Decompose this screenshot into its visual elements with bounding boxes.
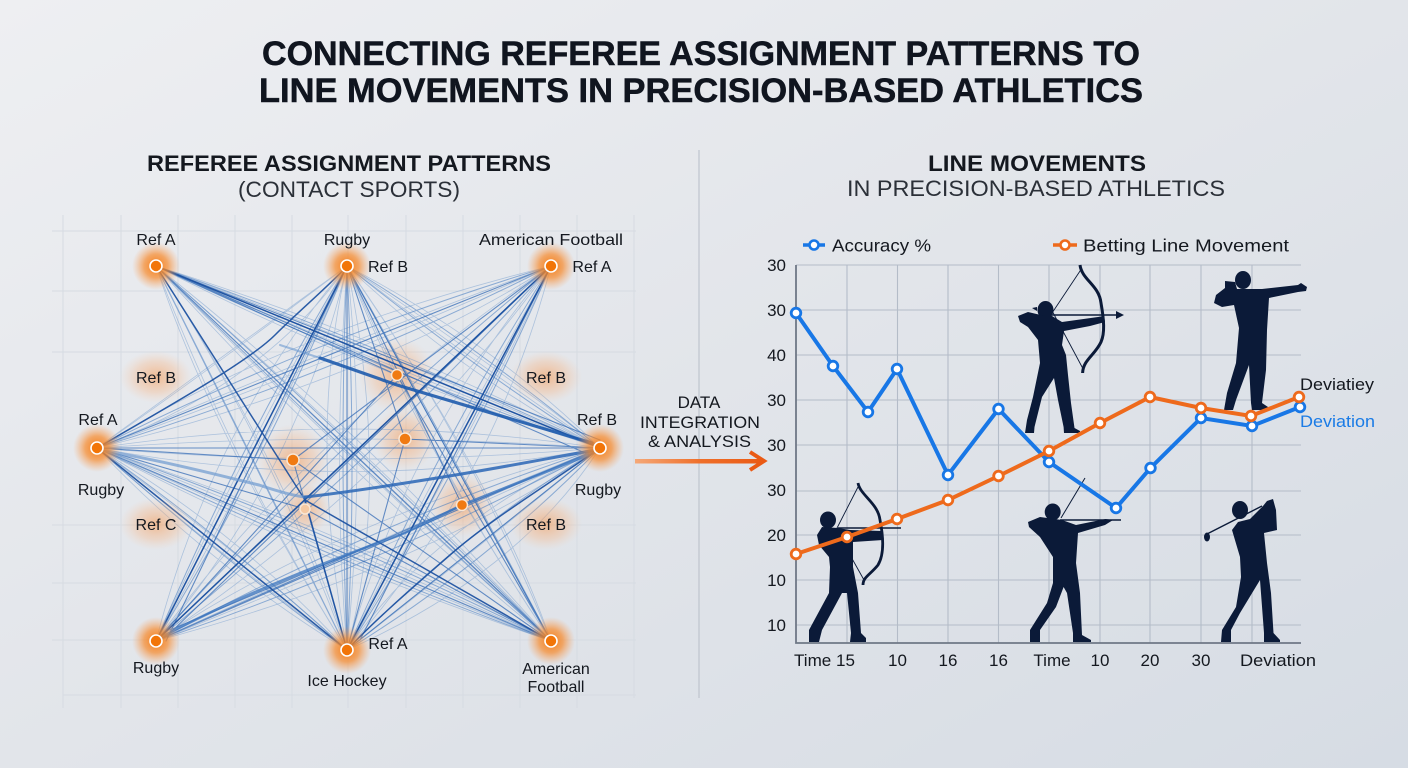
y axis labels: 30 bbox=[767, 436, 786, 455]
arrow: to line movements bbox=[635, 452, 764, 470]
series end labels: Deviatiey bbox=[1300, 376, 1375, 394]
network labels: Ref B bbox=[526, 370, 566, 387]
data integration callout: & ANALYSIS bbox=[648, 432, 751, 451]
data integration callout: DATA bbox=[678, 393, 721, 412]
right panel heading: IN PRECISION-BASED ATHLETICS bbox=[847, 176, 1225, 201]
y axis labels: 10 bbox=[767, 616, 786, 635]
network labels: Rugby bbox=[78, 482, 124, 499]
y axis labels: 30 bbox=[767, 256, 786, 275]
chart legend: Betting Line Movement bbox=[1083, 236, 1289, 256]
network labels: Football bbox=[528, 679, 584, 696]
chart grid and axes bbox=[796, 265, 1301, 643]
chart legend: Accuracy % bbox=[832, 236, 931, 256]
silhouette: archer lower centre bbox=[1028, 478, 1121, 642]
glow behind inner hubs bbox=[257, 337, 494, 537]
y axis labels: 30 bbox=[767, 481, 786, 500]
y axis labels: 10 bbox=[767, 571, 786, 590]
glowing unconnected referee badges bbox=[120, 351, 582, 550]
network labels: American Football bbox=[479, 232, 623, 249]
network labels: American bbox=[522, 661, 590, 678]
title: LINE MOVEMENTS IN PRECISION-BASED ATHLETICS bbox=[259, 72, 1143, 110]
title bbox=[259, 35, 1143, 110]
strong boundary links bbox=[97, 266, 600, 650]
panel: line movements bbox=[767, 151, 1375, 670]
network labels bbox=[78, 232, 623, 696]
left panel heading: REFEREE ASSIGNMENT PATTERNS bbox=[147, 151, 551, 176]
network graph: referee links bbox=[97, 266, 600, 650]
network labels: Ref A bbox=[136, 232, 176, 249]
silhouette: archer upper centre bbox=[1018, 265, 1124, 433]
silhouette: archer lower left bbox=[809, 483, 901, 642]
network labels: Ref B bbox=[526, 517, 566, 534]
x axis labels: Time bbox=[1033, 651, 1071, 670]
data integration callout: INTEGRATION bbox=[640, 413, 760, 432]
line series: betting line movement bbox=[791, 392, 1304, 559]
chart legend bbox=[803, 236, 1289, 256]
network labels: Ref B bbox=[136, 370, 176, 387]
left panel heading: (CONTACT SPORTS) bbox=[238, 177, 460, 202]
network labels: Ref A bbox=[572, 259, 612, 276]
x axis labels: 20 bbox=[1141, 651, 1159, 670]
network labels: Rugby bbox=[575, 482, 621, 499]
line series: accuracy percent bbox=[791, 308, 1305, 513]
medium link lines bbox=[97, 266, 600, 650]
right panel heading bbox=[847, 151, 1225, 201]
x axis labels: 10 bbox=[888, 651, 907, 670]
x axis labels: 16 bbox=[939, 651, 957, 670]
network labels: Ice Hockey bbox=[307, 673, 387, 690]
x axis labels: 30 bbox=[1192, 651, 1210, 670]
network labels: Ref B bbox=[577, 412, 617, 429]
x axis labels: 10 bbox=[1091, 651, 1109, 670]
panel: referee assignment patterns bbox=[52, 151, 636, 708]
silhouette: shooter upper right bbox=[1214, 271, 1307, 410]
outer referee nodes bbox=[73, 242, 624, 674]
y axis labels: 30 bbox=[767, 391, 786, 410]
network labels: Ref C bbox=[136, 517, 176, 534]
network labels: Rugby bbox=[133, 660, 179, 677]
data integration callout bbox=[635, 393, 764, 470]
thin link lines bbox=[97, 266, 600, 650]
network labels: Ref B bbox=[368, 259, 408, 276]
y axis labels: 20 bbox=[767, 526, 786, 545]
y axis labels: 30 bbox=[767, 301, 786, 320]
x axis labels bbox=[794, 651, 1316, 670]
network labels: Ref A bbox=[78, 412, 118, 429]
inner hub nodes bbox=[287, 370, 468, 514]
thick highlighted links bbox=[280, 345, 320, 358]
x axis labels: Time 15 bbox=[794, 651, 855, 670]
left panel heading bbox=[147, 151, 551, 202]
network labels: Rugby bbox=[324, 232, 370, 249]
network labels: Ref A bbox=[368, 636, 408, 653]
silhouette: golfer lower right bbox=[1204, 499, 1280, 642]
center divider bbox=[698, 150, 700, 698]
y axis labels: 40 bbox=[767, 346, 786, 365]
series end labels bbox=[1300, 376, 1375, 431]
y axis labels bbox=[767, 256, 786, 635]
x axis labels: Deviation bbox=[1240, 651, 1316, 670]
x axis labels: 16 bbox=[989, 651, 1008, 670]
denser secondary link lines bbox=[97, 266, 600, 650]
title: CONNECTING REFEREE ASSIGNMENT PATTERNS TO bbox=[262, 35, 1140, 73]
series end labels: Deviation bbox=[1300, 413, 1375, 431]
right panel heading: LINE MOVEMENTS bbox=[928, 151, 1146, 176]
